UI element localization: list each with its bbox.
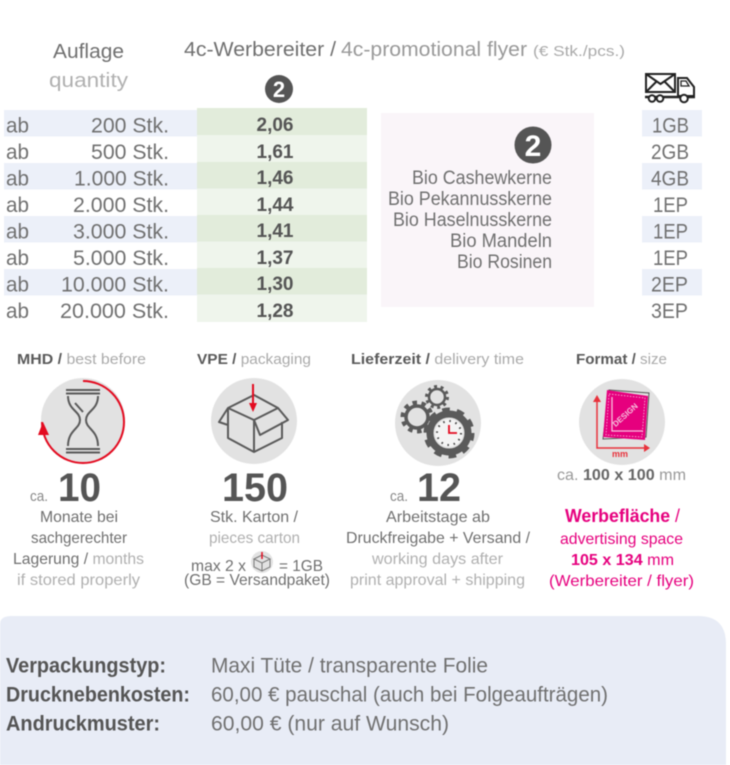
label and value: proof sample: 60,00 € (nur auf Wunsch)	[211, 712, 449, 736]
section: size: 105 x 134 mm	[571, 552, 674, 569]
section: delivery time: ca.	[390, 488, 408, 505]
section: best before: sachgerechter	[31, 530, 128, 547]
section: delivery time: 12	[417, 466, 461, 510]
table: price column: 1,46	[257, 168, 293, 189]
section: best before	[13, 351, 146, 589]
section: size: advertising space	[560, 531, 683, 548]
table: quantity rows: ab	[6, 300, 29, 323]
table: quantity rows: 500 Stk.	[91, 141, 169, 164]
table: price column: 1,30	[257, 274, 293, 295]
table: shipping units: 1EP	[653, 247, 688, 270]
panel: nut varieties: Bio Haselnusskerne	[393, 210, 552, 231]
label and value: packaging type: Verpackungstyp:	[6, 654, 166, 678]
header: quantity column	[49, 41, 128, 92]
table: quantity rows: 10.000 Stk.	[61, 274, 169, 296]
table: shipping units: 2GB	[651, 141, 689, 164]
header: quantity column: Auflage	[53, 41, 124, 63]
label and value: printing costs: 60,00 € pauschal (auch bei Folgeaufträgen)	[211, 684, 608, 706]
table: price column: 1,44	[257, 195, 294, 216]
section: best before: Lagerung / months	[13, 551, 144, 568]
section: delivery time: working days after	[371, 551, 504, 568]
section: packaging: (GB = Versandpaket)	[184, 572, 330, 589]
panel: nut varieties: Bio Rosinen	[457, 252, 552, 273]
table: quantity rows: 1.000 Stk.	[74, 168, 169, 190]
panel: additional information	[0, 616, 726, 765]
section: delivery time: Arbeitstage ab	[386, 509, 490, 526]
table: quantity rows: ab	[6, 114, 29, 138]
table: price column	[197, 108, 367, 322]
table: shipping units	[642, 110, 702, 323]
section: best before: 10	[58, 466, 101, 510]
table: quantity rows: 20.000 Stk.	[60, 300, 169, 323]
label and value: packaging type: Maxi Tüte / transparente Folie	[211, 654, 488, 678]
table: shipping units: 2EP	[651, 274, 688, 296]
table: price column: 1,61	[257, 142, 294, 163]
table: price column: 1,41	[257, 221, 294, 242]
icon: pink design sheet with axes: mm	[612, 449, 628, 459]
section: best before: Monate bei	[40, 509, 118, 526]
header: product title	[184, 39, 625, 61]
table: shipping units: 3EP	[651, 300, 688, 323]
table: quantity rows: ab	[6, 274, 29, 296]
icon: small carton	[251, 551, 273, 573]
header: product title: (€ Stk./pcs.)	[533, 43, 625, 60]
section: best before: if stored properly	[17, 572, 140, 589]
table: quantity rows: 3.000 Stk.	[73, 220, 169, 244]
section: packaging: VPE / packaging	[197, 351, 311, 368]
icon: pink design sheet with axes	[579, 379, 665, 465]
icon: hourglass with red arrow	[38, 378, 125, 463]
header: quantity column: quantity	[49, 70, 128, 92]
table: price column: 1,37	[257, 248, 293, 269]
badge: number 2 above prices: 2	[273, 77, 285, 102]
section: packaging: max 2 x	[191, 558, 246, 575]
table: quantity rows: 5.000 Stk.	[73, 247, 169, 270]
table: quantity rows	[4, 110, 197, 323]
table: quantity rows: ab	[6, 141, 29, 164]
section: size: Format / size	[576, 351, 667, 368]
table: quantity rows: ab	[6, 168, 29, 190]
label and value: proof sample: Andruckmuster:	[6, 712, 160, 736]
icon: pink design sheet with axes: DESIGN	[611, 401, 640, 429]
section: size: ca. 100 x 100 mm	[557, 467, 686, 484]
header: product title: 4c-promotional flyer	[341, 39, 527, 61]
table: price column: 2,06	[257, 115, 293, 136]
table: shipping units: 1EP	[653, 220, 688, 244]
table: shipping units: 1GB	[652, 114, 689, 138]
section: delivery time: Lieferzeit / delivery time	[351, 351, 524, 368]
panel: nut varieties: Bio Cashewkerne	[412, 168, 552, 189]
section: delivery time	[346, 351, 531, 589]
table: quantity rows: ab	[6, 220, 29, 244]
header: product title: 4c-Werbereiter /	[184, 39, 336, 61]
table: quantity rows: 2.000 Stk.	[73, 194, 169, 217]
badge: number 2 in panel: 2	[525, 130, 541, 163]
panel: nut varieties	[381, 113, 594, 307]
panel: nut varieties: Bio Pekannusskerne	[388, 189, 552, 210]
badge: number 2 in panel	[514, 126, 552, 164]
table: quantity rows: 200 Stk.	[91, 114, 169, 138]
section: best before: MHD / best before	[17, 351, 146, 368]
section: size: (Werbereiter / flyer)	[549, 573, 694, 590]
section: packaging	[184, 351, 330, 589]
icon: gears with clock	[395, 380, 481, 466]
section: size: Werbefläche /	[565, 506, 680, 526]
label and value: proof sample	[6, 712, 449, 736]
section: delivery time: print approval + shipping	[350, 572, 525, 589]
table: quantity rows: ab	[6, 194, 29, 217]
section: size	[549, 351, 694, 590]
table: shipping units: 1EP	[653, 194, 688, 217]
section: packaging: pieces carton	[209, 530, 300, 547]
panel: nut varieties: Bio Mandeln	[450, 231, 552, 252]
section: packaging: 150	[222, 466, 288, 510]
table: quantity rows: ab	[6, 247, 29, 270]
table: shipping units: 4GB	[651, 168, 689, 190]
icon: envelope delivery truck	[645, 74, 695, 102]
label and value: printing costs: Drucknebenkosten:	[6, 684, 190, 706]
section: packaging: = 1GB	[279, 558, 323, 575]
badge: number 2 above prices	[265, 75, 293, 103]
section: packaging: Stk. Karton /	[210, 509, 299, 526]
label and value: printing costs	[6, 684, 608, 706]
label and value: packaging type	[6, 654, 488, 678]
icon: open carton with red arrow	[211, 378, 297, 464]
table: price column: 1,28	[257, 301, 293, 322]
section: delivery time: Druckfreigabe + Versand /	[346, 530, 531, 547]
section: best before: ca.	[30, 488, 48, 505]
